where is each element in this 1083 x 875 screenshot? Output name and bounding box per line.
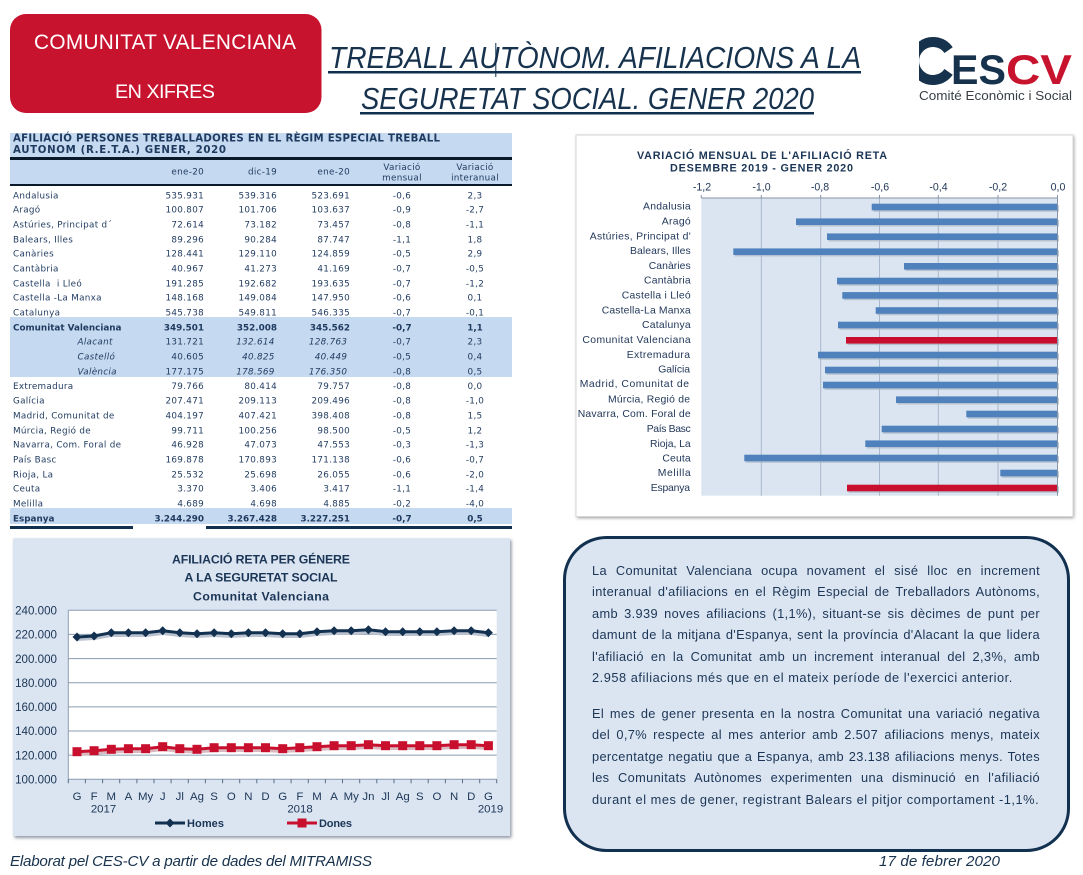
bar chart category labels: Ceuta <box>662 454 691 464</box>
bar chart category labels: Canàries <box>649 261 691 272</box>
table rows: 25.698 <box>244 470 277 480</box>
text block: commentary: El mes de gener presenta en la nostra Comunitat una variació negativa <box>592 706 1040 721</box>
table rows: Ceuta <box>13 484 40 494</box>
table rows: 3.406 <box>250 484 277 494</box>
y axis labels: 120.000 <box>15 749 57 762</box>
bar chart category labels: Espanya <box>651 483 690 494</box>
table rows: 87.747 <box>317 236 350 246</box>
table rows: Espanya <box>13 514 54 524</box>
table rows: Castella i Lleó <box>13 278 82 290</box>
table rows: Múrcia, Regió de <box>13 426 91 436</box>
footer: source: Elaborat pel CES-CV a partir de dades del MITRAMISS <box>10 853 372 870</box>
line chart title: Comunitat Valenciana <box>193 590 329 604</box>
table rows: 171.138 <box>312 456 350 466</box>
table rows: -0,5 <box>393 250 411 260</box>
title: TREBALL AUTÒNOM. AFILIACIONS A LA <box>329 40 861 75</box>
table rows: 149.084 <box>239 294 277 304</box>
table rows: -0,8 <box>393 396 411 406</box>
table rows: Alacant <box>76 338 113 348</box>
table rows: 2,3 <box>468 191 482 201</box>
table rows: -0,7 <box>466 456 484 466</box>
table rows: -1,2 <box>466 280 484 290</box>
table rows: 2,3 <box>468 338 482 348</box>
table rows: 40.605 <box>171 352 204 362</box>
table rows: -1,1 <box>393 484 411 494</box>
bar chart title: VARIACIÓ MENSUAL DE L'AFILIACIÓ RETA <box>637 149 887 162</box>
table rows: 73.457 <box>317 220 350 230</box>
panel: line chart by gender <box>13 538 512 838</box>
x axis labels: F <box>296 791 303 803</box>
bar chart category labels: Madrid, Comunitat de <box>580 379 689 390</box>
table rows: 25.532 <box>171 470 204 480</box>
table rows <box>13 191 484 525</box>
table rows: Rioja, La <box>13 470 53 480</box>
bar chart axis labels: -0,6 <box>871 182 889 194</box>
x axis labels: N <box>450 791 458 803</box>
header banner: Comunitat Valenciana en xifres: COMUNITAT VALENCIANA <box>34 31 296 54</box>
table rows: 3.227.251 <box>300 514 350 524</box>
table rows: 549.811 <box>239 308 277 318</box>
y axis labels: 100.000 <box>15 774 57 786</box>
y axis labels: 240.000 <box>15 604 57 618</box>
x axis labels: M <box>312 791 322 803</box>
table rows: 40.825 <box>242 352 275 362</box>
bar chart category labels: Comunitat Valenciana <box>582 335 691 346</box>
table rows: -1,1 <box>393 236 411 246</box>
text block: commentary: damunt de la mitjana d'Espanya, sent la província d'Alacant la que lidera <box>592 627 1040 642</box>
table header row: dic-19 <box>248 168 277 178</box>
line chart title: A LA SEGURETAT SOCIAL <box>184 570 338 584</box>
table rows: 535.931 <box>166 191 204 201</box>
table rows: 178.569 <box>236 368 275 378</box>
x axis labels: A <box>125 791 133 803</box>
x axis labels: G <box>73 791 82 803</box>
table title <box>13 132 440 156</box>
table header row: Variació <box>383 162 421 173</box>
bar chart axis labels: 0,0 <box>1051 182 1065 194</box>
bar chart category labels: Melilla <box>658 468 691 479</box>
table rows: 100.807 <box>166 206 204 216</box>
title: SEGURETAT SOCIAL. GENER 2020 <box>361 82 814 116</box>
table rows: 523.691 <box>312 191 350 201</box>
text block: commentary: del 0,7% respecte al mes anterior amb 2.507 afiliacions menys, mateix <box>592 727 1040 742</box>
table rows: 176.350 <box>309 368 347 378</box>
bar chart category labels: Astúries, Principat d' <box>590 232 691 242</box>
text block: commentary: percentatge negatiu que a Espanya, amb 23.138 afiliacions menys. Totes <box>592 749 1040 764</box>
table rows: 352.008 <box>237 324 277 334</box>
table rows: -1,1 <box>466 220 484 230</box>
table rows: 209.113 <box>239 396 277 406</box>
y axis labels: 220.000 <box>15 629 57 642</box>
table rows: 47.073 <box>244 440 277 450</box>
x axis labels: A <box>330 791 338 803</box>
bar chart title: DESEMBRE 2019 - GENER 2020 <box>670 162 853 174</box>
x axis labels: G <box>278 791 287 803</box>
table title: AFILIACIÓ PERSONES TREBALLADORES EN EL RÈGIM ESPECIAL TREBALL <box>13 132 440 144</box>
table rows: -0,6 <box>393 294 411 304</box>
table rows: 209.496 <box>312 396 350 406</box>
bar chart category labels: Múrcia, Regió de <box>608 394 690 406</box>
x axis labels: 2019 <box>478 804 503 816</box>
table rows: Balears, Illes <box>13 236 73 246</box>
table rows: Andalusia <box>13 191 59 201</box>
table rows: -0,1 <box>466 308 484 318</box>
table rows: 147.950 <box>312 294 350 304</box>
x axis labels: S <box>416 791 424 803</box>
table rows: 99.711 <box>171 426 204 436</box>
legend: Dones <box>319 818 352 830</box>
table rows: 73.182 <box>244 220 277 230</box>
bar chart category labels: Castella-La Manxa <box>602 306 691 316</box>
table rows: Extremadura <box>13 382 73 392</box>
table rows: 4.689 <box>177 500 204 510</box>
table rows: 0,4 <box>468 352 483 362</box>
table rows: 207.471 <box>166 396 204 406</box>
logo: CES CV: Comité Econòmic i Social <box>919 88 1072 103</box>
text block: commentary: 2.958 afiliacions més que en el mateix període de l'exercici anterior. <box>592 670 1013 685</box>
header banner: Comunitat Valenciana en xifres: EN XIFRES <box>115 81 215 103</box>
bar chart axis labels: -0,4 <box>929 182 948 194</box>
table rows: 170.893 <box>239 456 277 466</box>
table rows: 72.614 <box>171 220 204 230</box>
table header row: ene-20 <box>317 168 350 178</box>
table rows: 89.296 <box>171 236 204 246</box>
table rows: 3.267.428 <box>227 514 277 524</box>
table rows: Madrid, Comunitat de <box>13 412 115 422</box>
table rows: 128.441 <box>166 250 204 260</box>
table header row: ene-20 <box>171 168 204 178</box>
table rows: 26.055 <box>317 470 350 480</box>
table rows: 79.757 <box>317 382 350 392</box>
bar chart category labels: Rioja, La <box>650 439 691 450</box>
table rows: 132.614 <box>236 338 275 348</box>
table header row: interanual <box>451 174 499 184</box>
table rows: 0,0 <box>468 382 483 392</box>
table rows: 398.408 <box>312 412 350 422</box>
x axis labels: N <box>244 791 253 803</box>
x axis labels: My <box>138 791 153 803</box>
table rows: -1,4 <box>466 484 484 494</box>
x axis labels: Jn <box>362 791 374 803</box>
logo: CES CV: CV <box>1006 46 1072 93</box>
text block: commentary: La Comunitat Valenciana ocupa novament el sisé lloc en increment <box>592 563 1040 578</box>
x axis labels: 2018 <box>287 804 313 816</box>
table rows: -2,0 <box>466 470 484 480</box>
bar chart axis labels: -0,2 <box>989 182 1007 194</box>
table rows: 46.928 <box>171 440 204 450</box>
y axis labels: 200.000 <box>15 653 57 666</box>
table rows: -0,3 <box>393 440 411 450</box>
table rows: 41.273 <box>244 264 277 274</box>
table rows: -0,8 <box>393 412 411 422</box>
table rows: 40.967 <box>171 264 204 274</box>
table rows: 131.721 <box>166 338 204 348</box>
title <box>328 40 861 116</box>
table rows: 79.766 <box>171 382 204 392</box>
bars <box>733 204 1059 493</box>
table header row: Variació <box>456 162 494 173</box>
legend: Homes <box>187 818 224 830</box>
panel: monthly variation bar chart <box>576 135 1074 518</box>
bar chart category labels: País Basc <box>647 424 691 435</box>
table rows: 41.169 <box>317 264 350 274</box>
panel: commentary box background <box>564 538 1068 850</box>
bar chart axis labels: -1,0 <box>752 182 771 194</box>
table rows: -0,7 <box>393 338 411 348</box>
table rows: 545.738 <box>166 308 204 318</box>
bar chart axis labels: -0,8 <box>811 182 829 194</box>
table rows: 4.698 <box>250 500 277 510</box>
table rows: 128.763 <box>309 338 347 348</box>
table rows: 98.500 <box>317 426 350 436</box>
legend <box>155 818 352 830</box>
x axis labels: F <box>91 791 98 803</box>
text block: commentary: interanual d'afiliacions en el Règim Especial de Treballadors Autònoms, <box>592 584 1040 599</box>
bar chart category labels: Cantàbria <box>644 276 691 286</box>
table rows: 191.285 <box>166 280 204 290</box>
x axis labels: Jl <box>381 791 390 803</box>
table rows: 1,5 <box>468 412 482 422</box>
table rows: Astúries, Principat d´ <box>13 220 112 230</box>
table rows: 90.284 <box>244 236 277 246</box>
table rows: Cantàbria <box>13 264 59 274</box>
table title: AUTONOM (R.E.T.A.) GENER, 2020 <box>13 145 226 156</box>
x axis labels: S <box>210 791 218 803</box>
table header row: mensual <box>382 174 422 184</box>
text block: commentary: durant el mes de gener, registrant Balears el pitjor comportament -1,1%. <box>592 792 1039 807</box>
table rows: Canàries <box>13 250 54 260</box>
x axis labels: J <box>160 791 166 803</box>
table rows: 345.562 <box>310 324 350 334</box>
table header row <box>171 162 499 184</box>
table rows: Navarra, Com. Foral de <box>13 440 121 450</box>
bar chart category labels: Extremadura <box>627 350 690 361</box>
table rows: -0,9 <box>393 206 411 216</box>
table rows: 0,5 <box>467 514 483 524</box>
text block: commentary: l'afiliació en la Comunitat amb un increment interanual del 2,3%, amb <box>592 649 1040 664</box>
series: Homes <box>77 630 488 640</box>
table rows: -1,3 <box>466 440 484 450</box>
table rows: Galícia <box>13 396 45 406</box>
table rows: 4.885 <box>323 500 350 510</box>
x axis labels: M <box>107 791 116 803</box>
x axis labels: 2017 <box>91 804 116 816</box>
table rows: 404.197 <box>166 412 204 422</box>
table rows: Castella -La Manxa <box>13 294 102 304</box>
table rows: Aragó <box>13 205 40 216</box>
line chart title <box>172 552 350 604</box>
table rows: 3.417 <box>323 484 350 494</box>
table rows: 407.421 <box>239 412 277 422</box>
table rows: -0,7 <box>393 280 411 290</box>
x axis labels: O <box>432 791 441 803</box>
table rows: -0,8 <box>393 368 411 378</box>
table rows: 1,8 <box>468 236 482 246</box>
x axis labels: Ag <box>190 791 204 803</box>
logo: CES CV: ES <box>951 46 1006 93</box>
text block: commentary: amb 3.939 noves afiliacions (1,1%), situant-se sis dècimes de punt per <box>592 606 1040 621</box>
bar chart title <box>637 149 887 174</box>
x axis labels: G <box>484 791 493 803</box>
table rows: 546.335 <box>312 308 350 318</box>
table rows: 193.635 <box>312 280 350 290</box>
x axis labels: Jl <box>176 791 184 803</box>
table rows: Castelló <box>78 352 115 362</box>
text block: commentary: les Comunitats Autònomes experimenten una disminució en l'afiliació <box>592 770 1040 785</box>
line chart title: AFILIACIÓ RETA PER GÉNERE <box>172 552 350 566</box>
header banner: Comunitat Valenciana en xifres <box>10 14 322 113</box>
table rows: 349.501 <box>164 324 204 334</box>
x axis labels: My <box>344 791 359 803</box>
table rows: 539.316 <box>239 191 277 201</box>
x axis labels: D <box>467 791 475 803</box>
x axis labels: O <box>227 791 236 803</box>
y axis labels <box>15 604 57 786</box>
table rows: 0,5 <box>468 368 482 378</box>
table rows: -0,7 <box>393 264 411 274</box>
table rows: 129.110 <box>239 250 277 260</box>
table rows: Comunitat Valenciana <box>13 324 122 334</box>
table rows: -0,5 <box>466 264 484 274</box>
bar chart category labels: Catalunya <box>642 320 691 331</box>
table rows: -0,2 <box>393 500 411 510</box>
table rows: Melilla <box>13 500 43 510</box>
bar chart category labels: Castella i Lleó <box>622 290 691 302</box>
table rows: -0,8 <box>393 382 411 392</box>
bar chart category labels: Aragó <box>662 216 691 228</box>
series: Dones <box>77 745 488 754</box>
table rows: 101.706 <box>239 206 277 216</box>
table rows: -0,8 <box>393 220 411 230</box>
table rows: -0,5 <box>393 352 411 362</box>
table rows: -0,6 <box>393 456 411 466</box>
table rows: 3.370 <box>177 484 204 494</box>
table rows: 124.859 <box>312 250 350 260</box>
bar chart category labels <box>578 202 691 494</box>
y axis labels: 160.000 <box>15 701 57 714</box>
table rows: 2,9 <box>468 250 482 260</box>
table rows: València <box>78 366 117 378</box>
bar chart category labels: Andalusia <box>643 202 691 212</box>
table rows: -0,5 <box>393 426 411 436</box>
bar chart category labels: Balears, Illes <box>630 246 691 257</box>
table rows: -1,0 <box>466 396 484 406</box>
table rows: -0,6 <box>393 191 411 201</box>
bar chart category labels: Galícia <box>658 364 690 376</box>
table rows: 40.449 <box>315 352 347 362</box>
logo: CES CV <box>914 42 1072 103</box>
table rows: País Basc <box>13 456 57 466</box>
table rows: 3.244.290 <box>154 514 204 524</box>
table rows: 80.414 <box>244 382 277 392</box>
x axis labels <box>73 791 503 816</box>
table rows: -4,0 <box>466 500 484 510</box>
table rows: Catalunya <box>13 308 60 318</box>
x axis labels: D <box>261 791 270 803</box>
table rows: -0,7 <box>392 514 412 524</box>
table rows: 148.168 <box>166 294 204 304</box>
x axis labels: Ag <box>396 791 410 803</box>
table rows: 1,2 <box>468 426 482 436</box>
y axis labels: 140.000 <box>15 725 57 738</box>
table rows: 169.878 <box>166 456 204 466</box>
bar chart axis labels <box>693 182 1065 194</box>
table rows: 177.175 <box>166 368 204 378</box>
bar chart category labels: Navarra, Com. Foral de <box>578 409 691 420</box>
table rows: 0,1 <box>468 294 482 304</box>
table rows: -0,7 <box>392 324 412 334</box>
bar chart axis labels: -1,2 <box>693 182 711 194</box>
y axis labels: 180.000 <box>15 677 57 690</box>
table rows: 192.682 <box>239 280 277 290</box>
table rows: 100.256 <box>239 426 277 436</box>
table rows: 47.553 <box>317 440 350 450</box>
table rows: -0,6 <box>393 470 411 480</box>
table rows: 103.637 <box>312 206 350 216</box>
table rows: -2,7 <box>466 206 484 216</box>
table: affiliation by region <box>10 132 512 529</box>
table rows: 1,1 <box>467 324 483 334</box>
text block: commentary <box>592 563 1040 807</box>
footer: date: 17 de febrer 2020 <box>879 853 1001 870</box>
table rows: -0,7 <box>393 308 411 318</box>
